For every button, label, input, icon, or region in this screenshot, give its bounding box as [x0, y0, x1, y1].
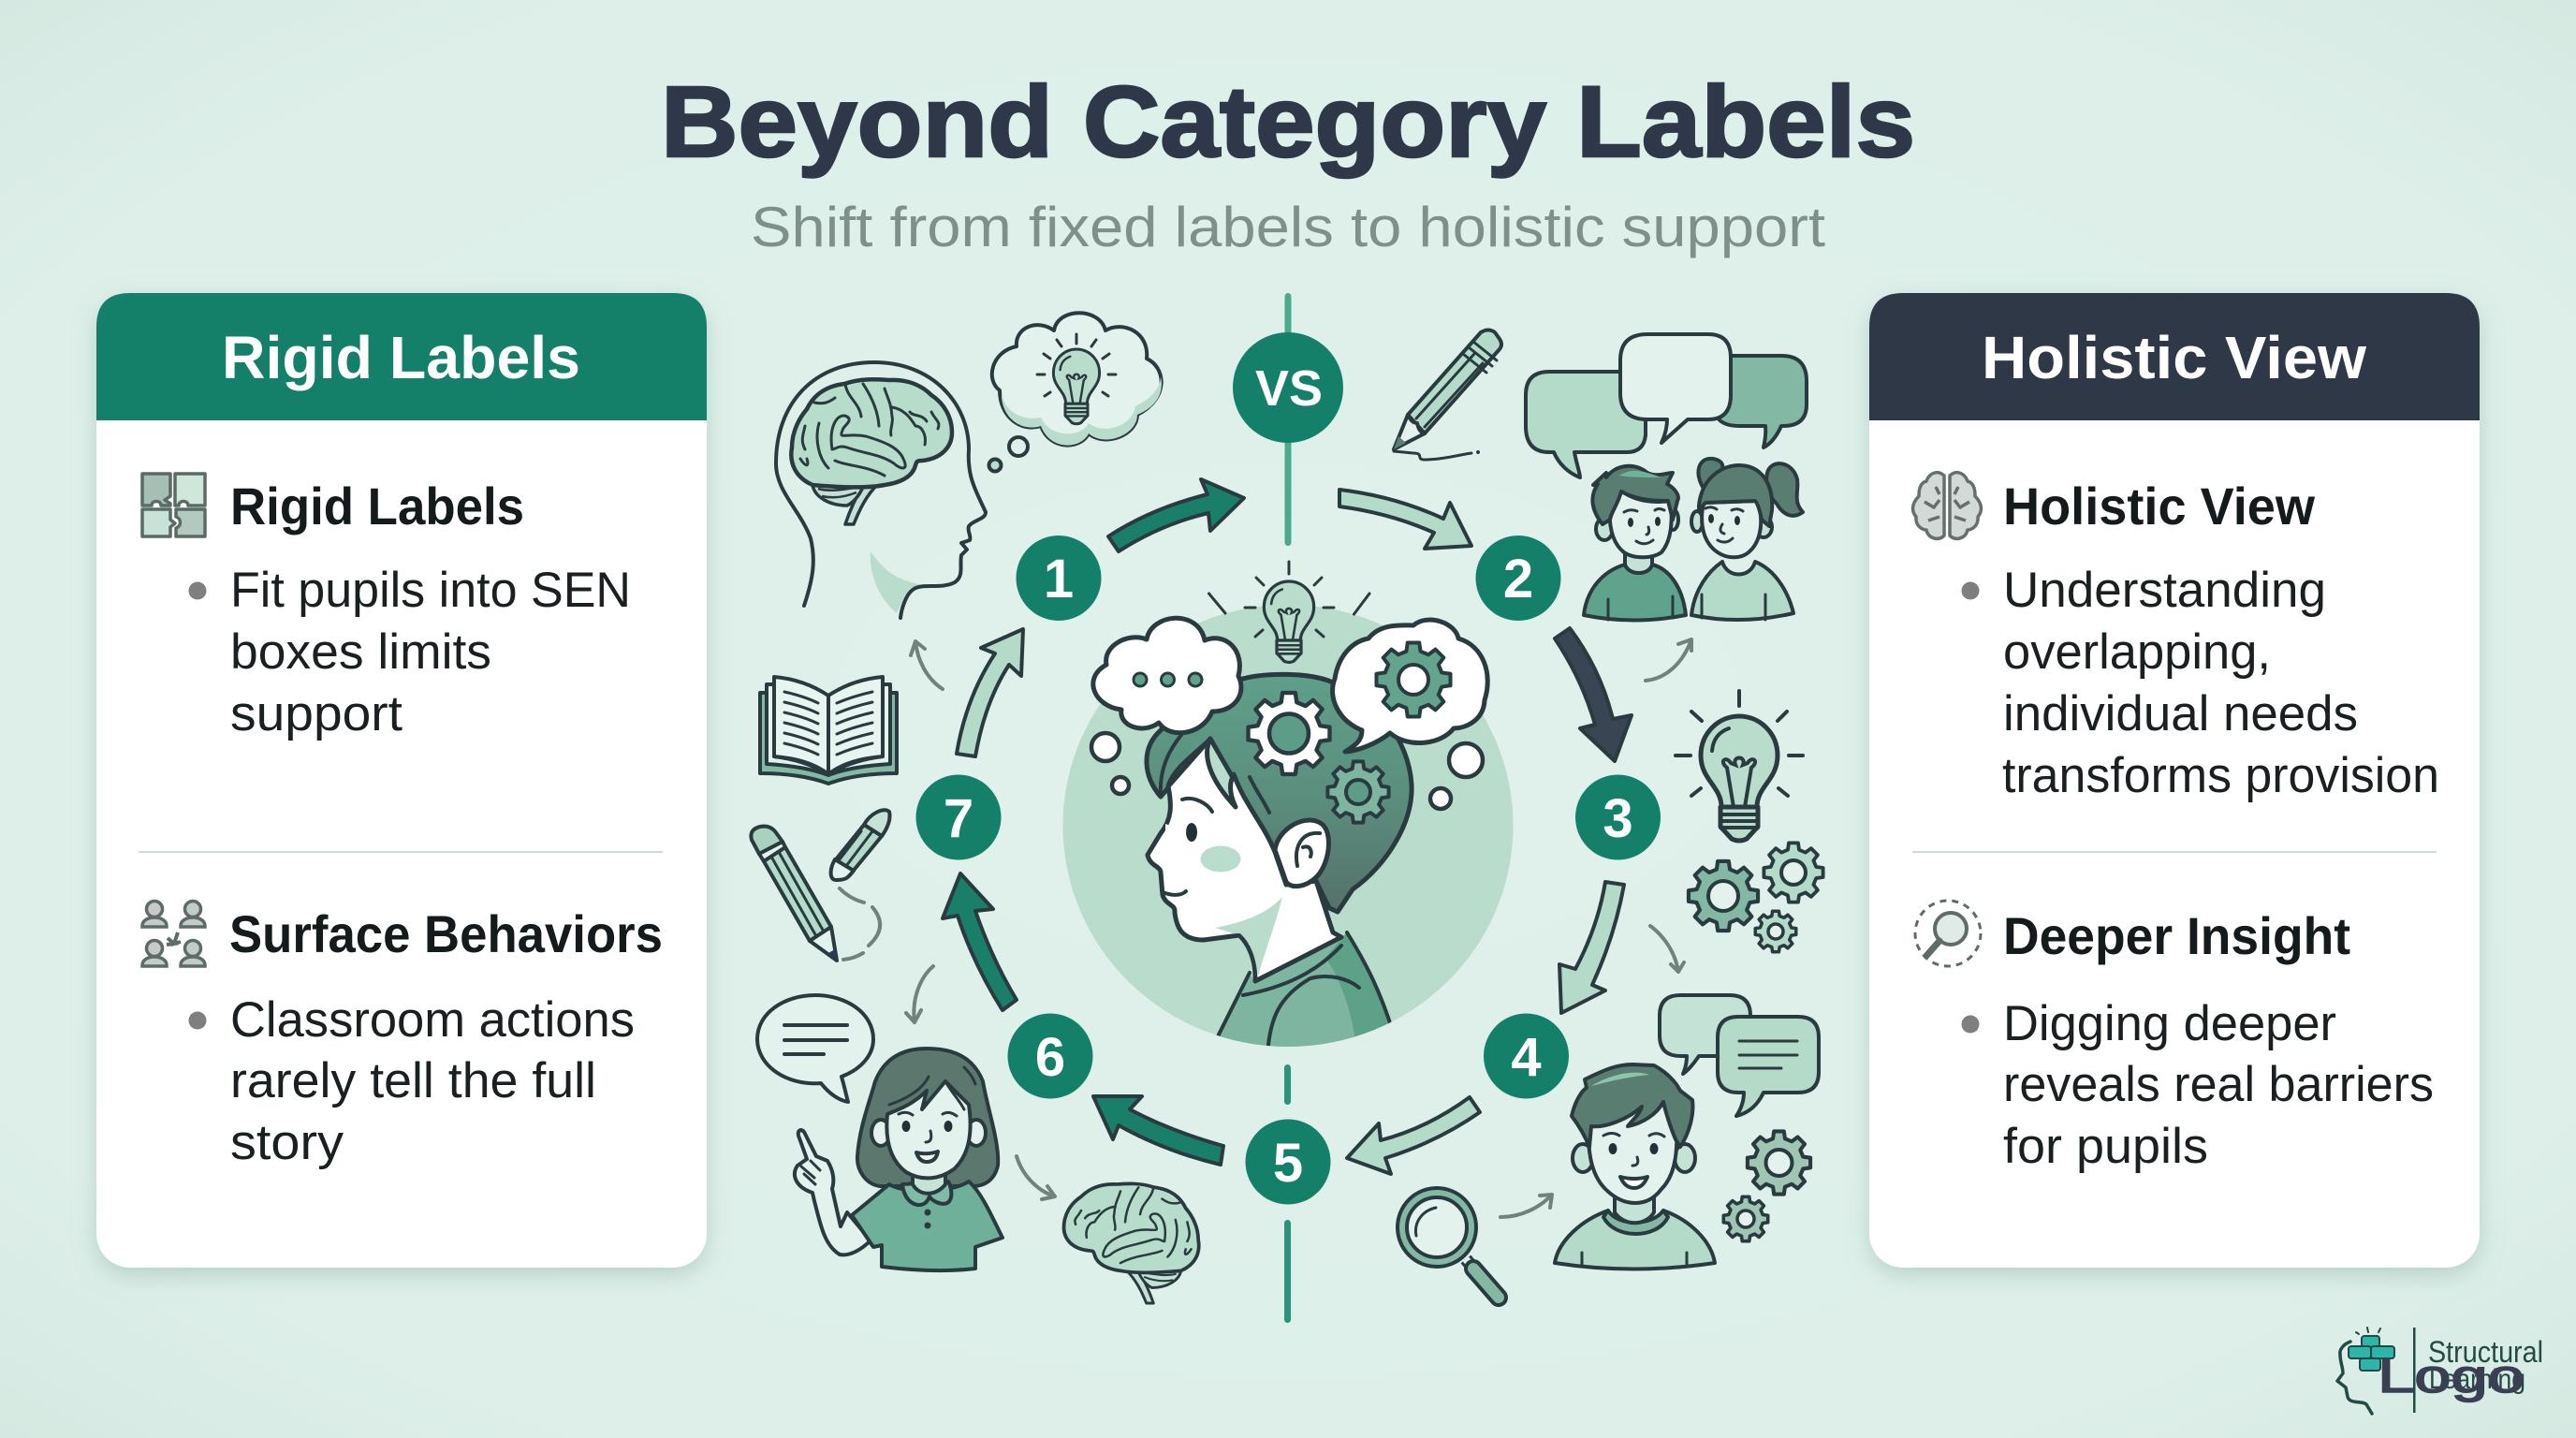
- icon: brain lower: [1064, 1183, 1199, 1303]
- arrow: step 2 to 3: [1555, 628, 1632, 761]
- thought circles: [1091, 733, 1483, 809]
- heading: deeper insight: Deeper Insight: [2003, 906, 2350, 965]
- heading: rigid labels: Rigid Labels: [230, 477, 524, 536]
- text block: holistic view bullet: [1962, 563, 2439, 803]
- number badge 5: 5: [1273, 1133, 1303, 1194]
- icon: thought cloud with lightbulb: [988, 313, 1162, 472]
- text block: deeper insight bullet: reveals real barriers: [2003, 1057, 2434, 1112]
- text block: rigid labels bullet: [189, 563, 631, 741]
- arrow: step 3 to 4: [1559, 882, 1624, 1013]
- text block: surface behaviors bullet: Classroom actions: [230, 992, 635, 1048]
- icon: pencil writing: [1394, 330, 1501, 460]
- arrow: step 1 to vs: [1108, 479, 1244, 551]
- vs divider line bottom: [1284, 1064, 1291, 1323]
- number badge 3: [1575, 775, 1661, 859]
- arrow: step 6 to 7: [943, 873, 1017, 1010]
- icon: pencils with dashed trail: [751, 810, 890, 961]
- icon: lightbulb above head: [1209, 562, 1369, 662]
- number badge 7: 7: [944, 788, 973, 849]
- arrow: vs to step 2: [1339, 490, 1471, 549]
- number badge 4: [1484, 1013, 1569, 1099]
- boy: [1584, 466, 1686, 620]
- text block: rigid labels bullet: support: [230, 686, 402, 741]
- panel: holistic view: [1869, 293, 2480, 1268]
- hair back: [857, 1049, 998, 1186]
- panel: rigid labels: [96, 293, 707, 1268]
- panel header: holistic view: [1869, 293, 2480, 420]
- icon: lightbulb with rays: [1676, 691, 1803, 841]
- number badge 2: [1475, 536, 1561, 621]
- text block: rigid labels bullet: boxes limits: [230, 624, 491, 680]
- panel header: rigid labels: Rigid Labels: [222, 324, 580, 391]
- arrow: step 7 to 1: [957, 629, 1023, 756]
- icon: speech bubble with lines: [757, 995, 873, 1102]
- number badge 6: 6: [1035, 1027, 1065, 1088]
- text block: deeper insight bullet: [1962, 996, 2434, 1174]
- logo: [2337, 1328, 2543, 1414]
- gears in hair: [1249, 693, 1389, 823]
- hair strands: [1161, 735, 1269, 813]
- vs divider line top: [1284, 293, 1292, 546]
- girl: [1691, 459, 1803, 620]
- thought bubble: dots: [1093, 618, 1241, 733]
- number badge 3: 3: [1603, 788, 1633, 849]
- text block: holistic view bullet: Understanding: [2003, 563, 2326, 618]
- number badge 7: [915, 775, 1002, 859]
- text block: holistic view bullet: overlapping,: [2003, 624, 2271, 680]
- arm and hand: [795, 1130, 871, 1255]
- panel header: rigid labels: [96, 293, 707, 420]
- number badge 2: 2: [1503, 549, 1533, 609]
- logo: Logo: [2378, 1350, 2525, 1402]
- heading: surface behaviors: Surface Behaviors: [229, 904, 663, 963]
- ear: [1275, 820, 1328, 887]
- number badge 1: [1017, 536, 1101, 621]
- text block: surface behaviors bullet: story: [230, 1115, 344, 1170]
- icon: open book: [760, 677, 897, 784]
- icon: speech bubbles with lines: [1660, 995, 1819, 1116]
- text block: deeper insight bullet: Digging deeper: [2003, 996, 2336, 1051]
- text block: surface behaviors bullet: [189, 992, 635, 1170]
- icon: boy smiling: [1555, 1064, 1715, 1269]
- logo head outline: [2337, 1342, 2372, 1414]
- icon: gears near boy: [1723, 1131, 1810, 1241]
- vs badge: VS: [1255, 360, 1323, 417]
- icon: brain top view: [1913, 473, 1981, 538]
- icon: overlapping speech bubbles: [1526, 334, 1807, 477]
- number badge 4: 4: [1511, 1027, 1542, 1088]
- logo: Learning: [2429, 1364, 2525, 1395]
- small curved arrows: [906, 639, 1691, 1217]
- icon: magnifier insight: [1915, 901, 1981, 966]
- shirt: [1216, 932, 1393, 1057]
- text block: deeper insight bullet: for pupils: [2003, 1119, 2208, 1174]
- thought bubble: gear: [1333, 620, 1487, 752]
- heading: holistic view: Holistic View: [2003, 477, 2315, 536]
- logo: Structural: [2428, 1335, 2543, 1369]
- hair: [1147, 674, 1412, 912]
- icon: magnifying glass: [1398, 1188, 1499, 1298]
- icon: head with brain: [776, 362, 986, 618]
- number badge 6: [1007, 1013, 1093, 1099]
- arrow: step 4 to 5: [1347, 1097, 1480, 1174]
- text block: holistic view bullet: transforms provision: [2002, 748, 2439, 803]
- icon: three gears: [1689, 843, 1823, 952]
- panel header: holistic view: Holistic View: [1982, 324, 2366, 391]
- arrow: step 5 to 6: [1093, 1096, 1223, 1165]
- vs badge: [1233, 332, 1343, 443]
- icon: puzzle pieces: [142, 474, 205, 536]
- central illustration: child thinking: [1063, 562, 1513, 1057]
- text block: holistic view bullet: individual needs: [2003, 686, 2358, 741]
- shirt: [852, 1181, 1003, 1270]
- number badge 5: [1245, 1120, 1331, 1204]
- text block: surface behaviors bullet: rarely tell the full: [230, 1053, 596, 1108]
- icon: people group: [142, 901, 205, 966]
- text block: rigid labels bullet: Fit pupils into SEN: [230, 563, 631, 618]
- title: Beyond Category Labels: [661, 65, 1915, 178]
- icon: two children: [1584, 459, 1803, 620]
- subtitle: Shift from fixed labels to holistic support: [751, 196, 1825, 258]
- logo bricks: [2349, 1336, 2394, 1371]
- icon: girl pointing: [795, 1049, 1003, 1270]
- face: [1148, 739, 1341, 981]
- number badge 1: 1: [1044, 549, 1074, 609]
